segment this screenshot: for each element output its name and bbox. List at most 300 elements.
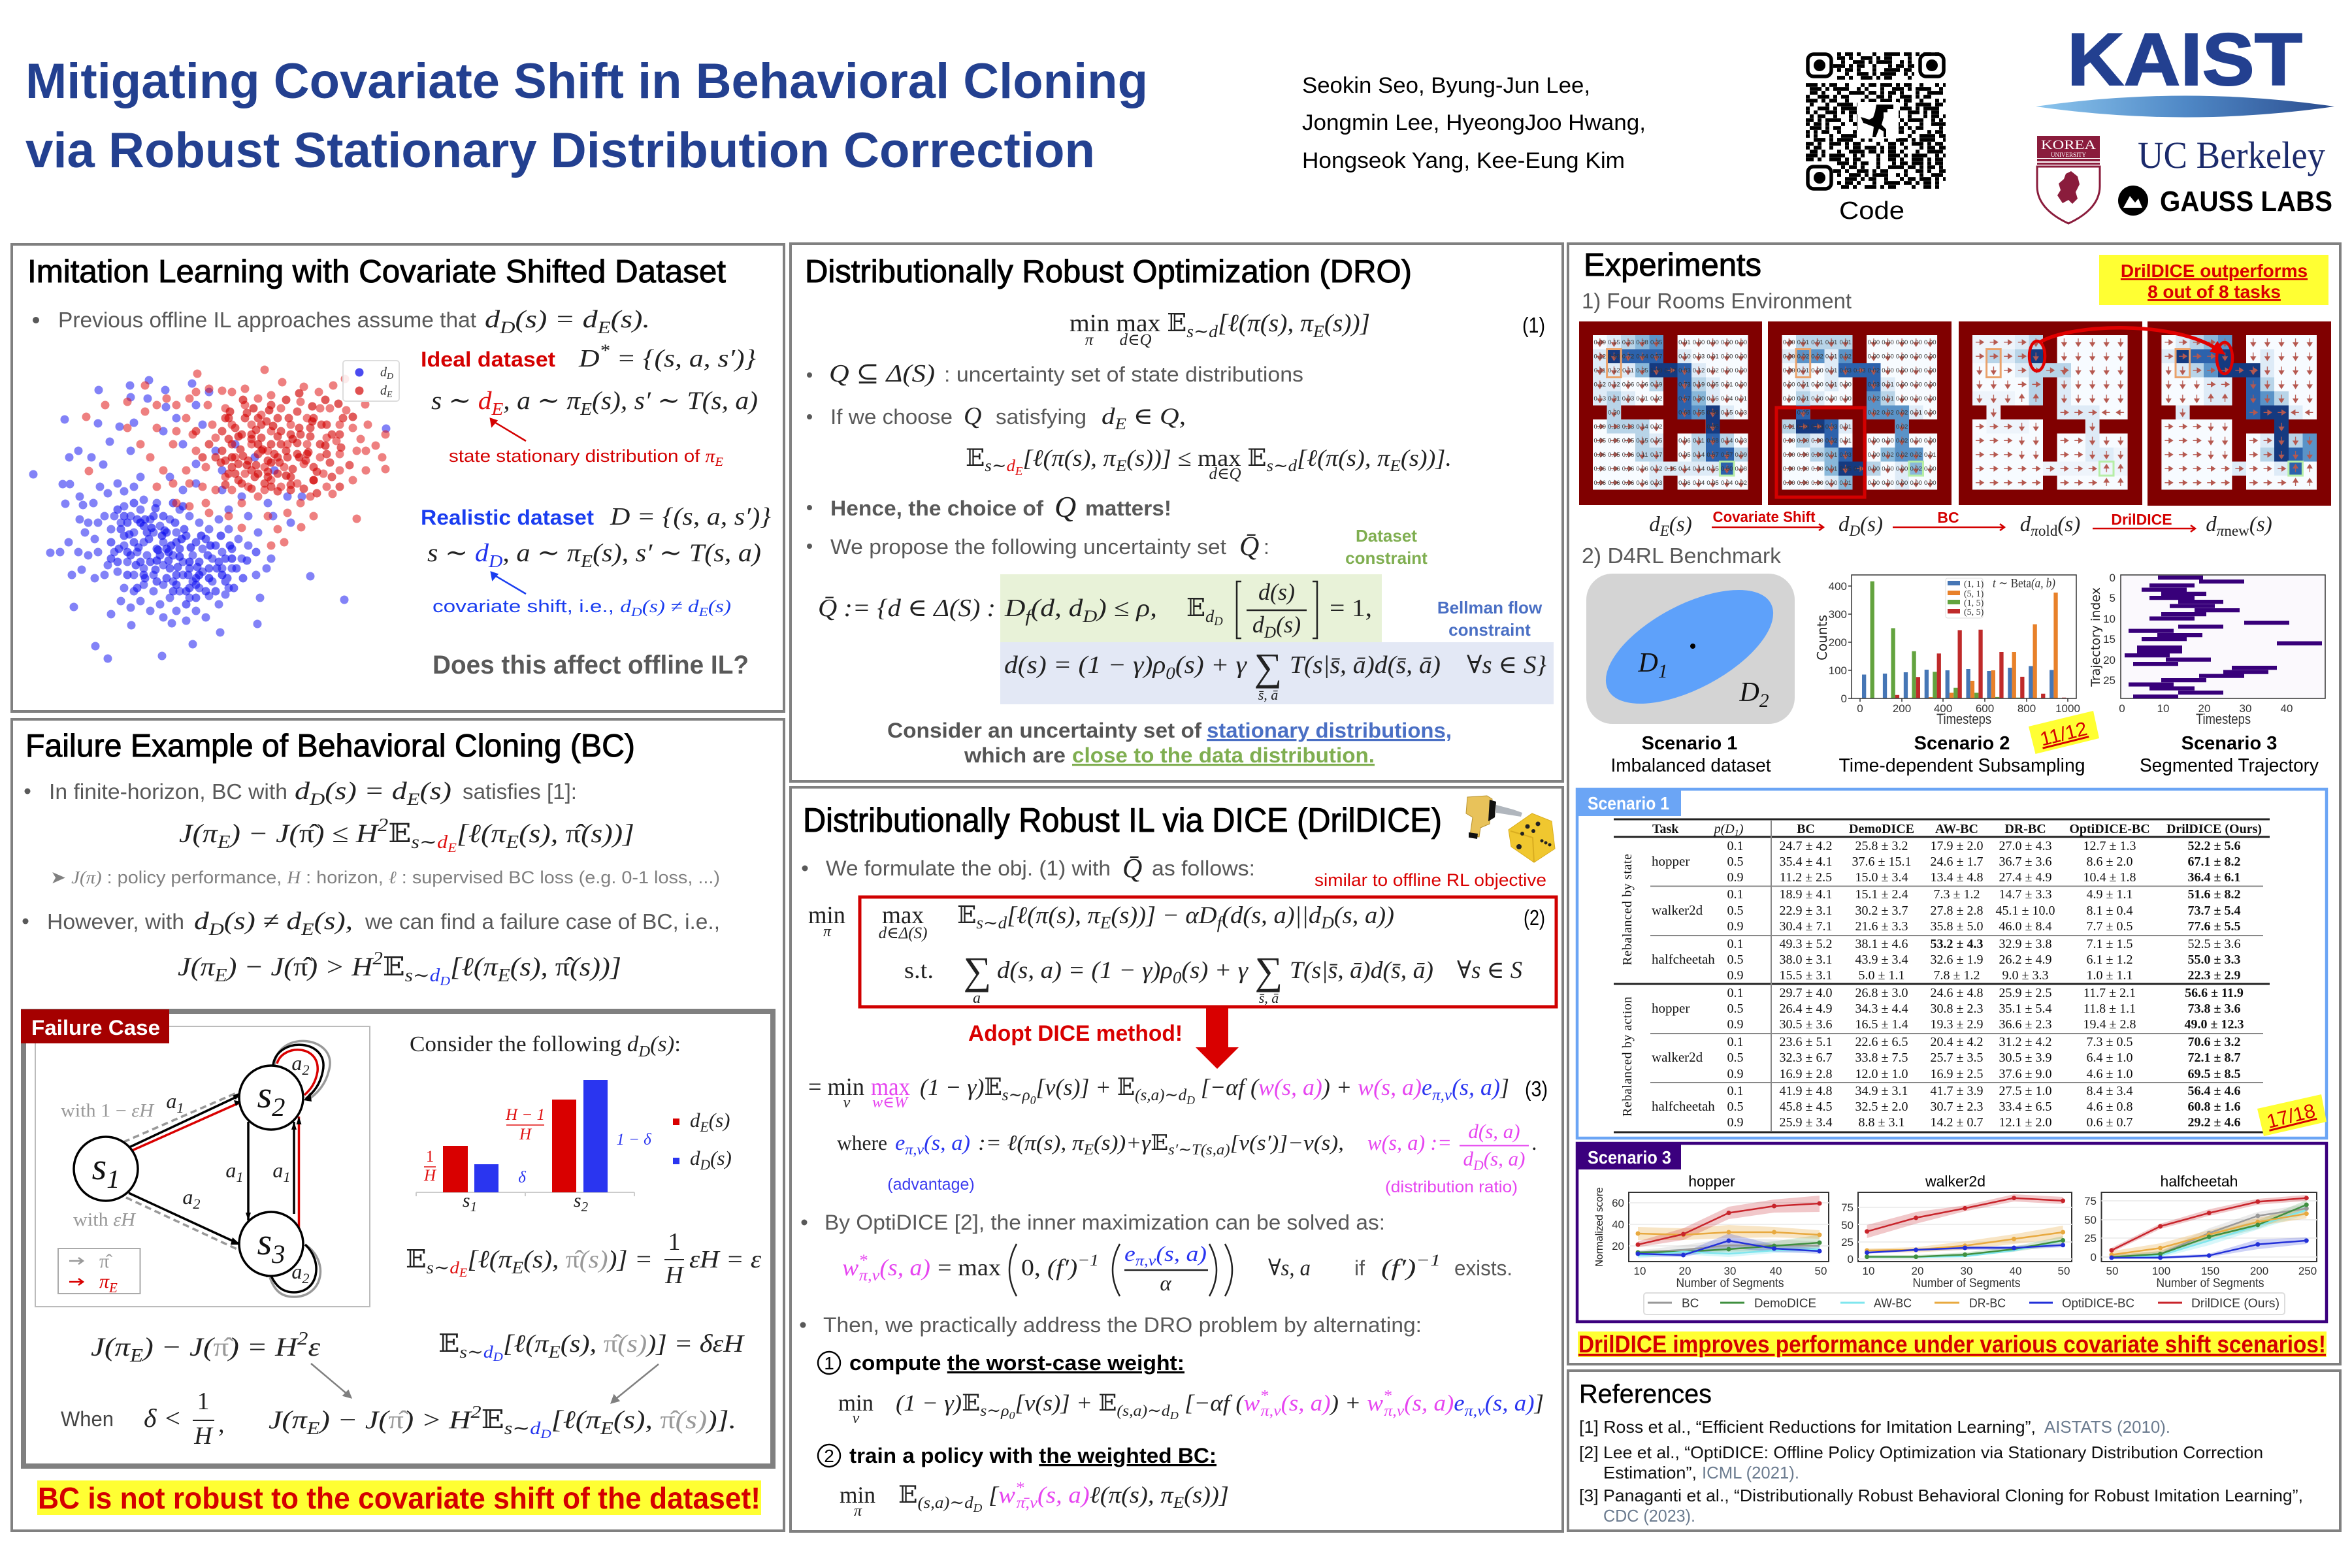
annotation: dataset constraint: [1345, 526, 1428, 568]
highlighted set definition: s̄, ā: [1258, 687, 1278, 703]
results table: 15.5 ± 3.1: [1780, 968, 1832, 983]
cell values: d_E: 0.06: [1608, 465, 1620, 473]
equation: expected loss under d_E: εH = ε: [689, 1246, 761, 1273]
cell values: d_D: 0.00: [1896, 353, 1908, 361]
results table: hopper: [1652, 1000, 1690, 1016]
results table: 0.5: [1727, 855, 1743, 869]
cell values: d_D: 0.00: [1910, 395, 1922, 402]
results table: 4.6 ± 1.0: [2087, 1067, 2132, 1081]
cell values: d_E: 0.14: [1636, 423, 1648, 431]
cell values: d_E: 0.98: [1707, 409, 1719, 417]
bar chart: time-dependent subsampling: 1000: [2055, 702, 2080, 715]
cell values: d_D: [1783, 339, 1936, 487]
sticker: 17/18: [2257, 1094, 2327, 1136]
chart legend: DemoDICE: [1754, 1297, 1816, 1311]
scatter plot: d_D versus d_E: [33, 370, 386, 659]
conclusion: when delta is small: ,: [218, 1411, 225, 1438]
results table: Rebalanced by action: [1620, 996, 1635, 1117]
ideal dataset definition: s ∼ dE, a ∼ π E(s), s′ ∼ T(s, a): [431, 387, 758, 419]
takeaway text: Consider an uncertainty set of: [887, 719, 1201, 742]
cell values: d_D: 0.01: [1882, 395, 1894, 402]
callout: outperforms 8 of 8: 8 out of 8 tasks: [2148, 282, 2281, 302]
cell values: d_D: 0.02: [1868, 409, 1880, 417]
cell values: d_E: 0.06: [1622, 451, 1634, 459]
panel: distributionally robust optimization: [791, 244, 1563, 781]
cell values: d_D: 0.01: [1924, 451, 1936, 459]
bullet: BC bound: dD(s) = d E(s): [295, 777, 451, 809]
MDP diagram: π̂: [99, 1250, 112, 1272]
MDP diagram: πE: [99, 1271, 118, 1296]
cell values: d_E: 0.28: [1636, 339, 1648, 346]
results table: 52.5 ± 3.6: [2188, 937, 2240, 951]
cell values: d_E: 0.05: [1594, 438, 1606, 444]
line chart: walker2d: 40: [2010, 1265, 2021, 1277]
cell values: d_E: 0.13: [1608, 423, 1620, 431]
results table: 27.8 ± 2.8: [1931, 904, 1983, 918]
MDP diagram: a1: [225, 1158, 244, 1185]
bar chart: time-dependent subsampling: (5, 5): [1964, 608, 1984, 617]
line chart: halfcheetah: 150: [2201, 1265, 2219, 1277]
results table: p(D1): [1713, 822, 1744, 838]
results table: 0.9: [1727, 1115, 1743, 1130]
cell values: d_E: 0.12: [1608, 367, 1620, 374]
results table: 19.4 ± 2.8: [2083, 1017, 2136, 1032]
chart: segmented trajectory: 10: [2103, 613, 2115, 625]
line chart: halfcheetah: 50: [2106, 1265, 2118, 1277]
bar chart: time-dependent subsampling: Counts: [1814, 615, 1830, 661]
authors: [1302, 73, 1646, 173]
chart: segmented trajectory: 40: [2281, 702, 2293, 715]
cell values: d_E: 0.00: [1735, 339, 1747, 346]
reference list: [2] Lee et al., “OptiDICE: Offline Policy Optimization via Stationary Distribution Correction: [1579, 1443, 2263, 1462]
bar chart: time-dependent subsampling: 0: [1841, 693, 1847, 705]
takeaway banner: BC is not robust to the covariate shift of the dataset!: [38, 1481, 760, 1515]
cell values: d_D: 0.00: [1910, 367, 1922, 374]
cell values: d_D: 0.02: [1839, 353, 1852, 361]
chart: segmented trajectory: 0: [2119, 702, 2125, 715]
cell values: d_D: 0.03: [1797, 423, 1809, 431]
panel: experiments: [1568, 244, 2340, 1364]
heading: References: [1579, 1380, 1712, 1409]
cell values: d_D: 0.00: [1797, 438, 1809, 444]
cell values: d_E: 0.57: [1721, 451, 1733, 459]
bullet: uncertainty set: : uncertainty set of state distributions: [944, 363, 1303, 386]
cell values: d_E: 1.00: [1650, 367, 1662, 374]
bullet: formulation: as follows:: [1152, 857, 1255, 880]
bar chart: d_E and d_D on s1, s2: s2: [574, 1190, 589, 1215]
label: failure case: Failure Case: [31, 1016, 160, 1039]
highlighted set definition: dD(s): [1252, 612, 1301, 642]
line chart: hopper: 20: [1679, 1265, 1691, 1277]
bar chart: time-dependent subsampling: 0: [1857, 702, 1863, 715]
scenario captions: Segmented Trajectory: [2140, 755, 2319, 776]
cell values: d_E: 0.06: [1594, 480, 1606, 487]
chart: segmented trajectory: Trajectory index: [2089, 587, 2103, 687]
results table: 14.7 ± 3.3: [1999, 887, 2051, 902]
chart: segmented trajectory: 20: [2103, 654, 2115, 666]
equation 3: [808, 1073, 1548, 1111]
cell values: d_E: 0.15: [1721, 409, 1733, 417]
cell values: d_E: 0.06: [1622, 480, 1634, 487]
results table: 73.7 ± 5.4: [2188, 904, 2240, 918]
four rooms heatmap: DrilDICE policy: [2148, 321, 2331, 506]
cell values: d_D: 0.01: [1854, 465, 1866, 473]
cell values: d_E: 0.12: [1650, 465, 1662, 473]
results table: 33.4 ± 6.5: [1999, 1100, 2051, 1114]
highlighted set definition: 𝔼dD: [1186, 595, 1223, 629]
cell values: d_E: 0.01: [1721, 382, 1733, 388]
flow labels: four rooms: DrilDICE: [2111, 511, 2172, 528]
reference list: ICML (2021).: [1702, 1463, 1799, 1482]
cell values: d_D: 0.01: [1825, 353, 1837, 361]
line chart: halfcheetah: 0: [2091, 1251, 2097, 1264]
bullet: failure with covariate shift: However, with: [47, 909, 184, 934]
conclusion: when delta is small: δ <: [144, 1403, 182, 1433]
cell values: d_E: 0.57: [1650, 353, 1662, 361]
cell values: d_E: 0.15: [1707, 465, 1719, 473]
cell values: d_D: 0.00: [1910, 353, 1922, 361]
bullet: OptiDICE: By OptiDICE [2], the inner maximization can be solved as:: [825, 1211, 1385, 1234]
results table: 55.0 ± 3.3: [2188, 953, 2240, 967]
cell values: d_D: 0.00: [1811, 451, 1823, 459]
results table: 0.9: [1727, 968, 1743, 983]
bullet: choosing Q: Q: [964, 402, 981, 430]
line chart: walker2d: 75: [1841, 1201, 1854, 1214]
scatter legend: dE: [380, 384, 393, 400]
heading: Imitation Learning with Covariate Shifted Dataset: [27, 254, 726, 289]
flow labels: four rooms: dπnew(s): [2206, 513, 2272, 539]
results table: 12.7 ± 1.3: [2083, 839, 2136, 853]
equation: policy update: π: [854, 1503, 862, 1520]
results table: 77.6 ± 5.5: [2188, 919, 2240, 934]
scatter legend: [343, 361, 399, 401]
cell values: d_E: 0.03: [1693, 353, 1705, 361]
equation 2 box: ∑: [964, 949, 991, 992]
reference list: [1] Ross et al., “Efficient Reductions for Imitation Learning”,: [1579, 1417, 2036, 1437]
equation 3: w∈W: [872, 1094, 909, 1111]
step 2: weighted BC: 2: [824, 1446, 834, 1466]
cell values: d_E: 0.06: [1636, 382, 1648, 388]
scenario captions: Scenario 3: [2181, 733, 2277, 754]
bar chart: time-dependent subsampling: 300: [1829, 608, 1847, 621]
cell values: d_E: 0.05: [1622, 438, 1634, 444]
equation: closed-form weight: ∀s, a: [1268, 1255, 1311, 1281]
line chart: hopper: 30: [1724, 1265, 1736, 1277]
cell values: d_E: 0.06: [1636, 465, 1648, 473]
equation: closed-form weight: 0, (f′)−1: [1021, 1252, 1099, 1281]
line chart: hopper: 20: [1612, 1240, 1624, 1252]
results table: OptiDICE-BC: [2069, 822, 2150, 836]
cell values: d_E: 0.06: [1636, 480, 1648, 487]
line chart: halfcheetah: 50: [2084, 1214, 2097, 1226]
equation 1: (1): [1522, 313, 1545, 337]
equation 3: (3): [1525, 1077, 1548, 1101]
results table: 0.1: [1727, 1035, 1743, 1049]
cell values: d_E: 0.14: [1678, 465, 1691, 473]
equation 3: max: [871, 1073, 910, 1101]
equation 3: (1 − γ)𝔼s∼ρ0[ν(s)] + 𝔼(s,a)∼dD [−αf (w(s, a)) + w(s, a)eπ,ν(s, a)]: [920, 1074, 1509, 1107]
arrow: adopt DICE: [1196, 1008, 1239, 1069]
cell values: d_E: 0.19: [1650, 382, 1662, 388]
MDP diagram: a1: [166, 1089, 184, 1116]
scatter legend: dD: [380, 365, 393, 382]
chart: segmented trajectory: [2089, 572, 2325, 727]
results table: 32.5 ± 2.0: [1855, 1100, 1908, 1114]
equation 2 box: s̄, ā: [1259, 990, 1279, 1006]
cell values: d_E: 0.14: [1693, 465, 1705, 473]
results table: 4.6 ± 0.8: [2087, 1100, 2132, 1114]
cell values: d_D: 0.00: [1910, 382, 1922, 388]
results table: 8.8 ± 3.1: [1859, 1115, 1904, 1130]
cell values: d_D: 0.03: [1868, 382, 1880, 388]
MDP diagram: s1: [92, 1145, 120, 1194]
cell values: d_D: 0.00: [1868, 451, 1880, 459]
bar chart: time-dependent subsampling: 100: [1829, 664, 1847, 677]
flow labels: four rooms: dD(s): [1838, 513, 1883, 539]
results table: 26.8 ± 3.0: [1855, 986, 1908, 1000]
results table: 33.8 ± 7.5: [1855, 1051, 1908, 1065]
step 1: compute worst-case weight: 1: [824, 1353, 834, 1373]
cell values: d_E: 0.15: [1608, 339, 1620, 346]
cell values: d_E: 0.19: [1693, 382, 1705, 388]
cell values: d_D: 0.00: [1882, 480, 1894, 487]
cell values: d_E: 0.72: [1622, 353, 1634, 361]
bullet: choice matters: Hence, the choice of: [830, 497, 1043, 520]
cell values: d_D: 0.01: [1825, 465, 1837, 473]
chart: segmented trajectory: 5: [2110, 592, 2115, 604]
line chart: halfcheetah: 75: [2084, 1195, 2097, 1207]
results table: 10.4 ± 1.8: [2083, 870, 2136, 885]
equation 2 box: 𝔼s∼d[ℓ(π(s), πE(s))] − αD f(d(s, a)||dD(s, a)): [957, 902, 1394, 932]
line chart: halfcheetah: 25: [2084, 1232, 2097, 1245]
bullet: formulation: Q̄: [1122, 854, 1142, 884]
cell values: d_D: 0.00: [1924, 382, 1936, 388]
MDP diagram: a1: [272, 1158, 291, 1185]
cell values: d_E: 0.06: [1594, 465, 1606, 473]
results table: 7.1 ± 1.5: [2087, 937, 2132, 951]
authors: Hongseok Yang, Kee-Eung Kim: [1302, 148, 1625, 173]
results table: 53.2 ± 4.3: [1931, 937, 1983, 951]
cell values: d_E: 0.05: [1650, 438, 1662, 444]
cell values: d_D: 0.02: [1868, 367, 1880, 374]
cell values: d_E: 0.21: [1608, 395, 1620, 402]
cell values: d_E: 0.67: [1707, 451, 1719, 459]
bullet: uncertainty set: Q ⊆ Δ(S): [829, 360, 935, 387]
cell values: d_D: 0.00: [1783, 438, 1795, 444]
ideal dataset definition: D* = {(s, a, s′)}: [578, 340, 756, 372]
cell values: d_D: 0.02: [1868, 395, 1880, 402]
cell values: d_D: 0.02: [1910, 451, 1922, 459]
logo: KAIST: KAIST: [2067, 18, 2302, 101]
reference list: CDC (2023).: [1603, 1506, 1695, 1526]
cell values: d_D: 0.00: [1924, 480, 1936, 487]
cell values: d_E: 0.06: [1608, 480, 1620, 487]
highlighted set definition: ∀s ∈ S}: [1467, 651, 1546, 679]
results table: 37.6 ± 9.0: [1999, 1067, 2051, 1081]
cell values: d_E: 0.11: [1693, 438, 1705, 444]
cell values: d_E: 0.15: [1636, 438, 1648, 444]
bar chart: time-dependent subsampling: 400: [1934, 702, 1952, 715]
results table: 27.4 ± 4.9: [1999, 870, 2051, 885]
reference list: [3] Panaganti et al., “Distributionally Robust Behavioral Cloning for Robust Imitation Learning”,: [1579, 1486, 2303, 1505]
realistic dataset definition: D = {(s, a, s′)}: [610, 503, 771, 531]
where line: advantage and ratio definitions: where: [837, 1131, 887, 1154]
results table: 15.0 ± 3.4: [1855, 870, 1908, 885]
cell values: d_D: 0.00: [1811, 480, 1823, 487]
results table: 7.3 ± 1.2: [1934, 887, 1980, 902]
cell values: d_E: 0.01: [1636, 395, 1648, 402]
cell values: d_E: 0.67: [1678, 395, 1691, 402]
curved arrow: policy correction: [2029, 328, 2232, 374]
results table: 21.6 ± 3.3: [1855, 919, 1908, 934]
QR code to code repository: [1786, 54, 1946, 189]
cell values: d_E: 0.00: [1693, 339, 1705, 346]
panel: failure example of behavioral cloning: [12, 719, 784, 1531]
y axis label: Normalized score: [1593, 1187, 1605, 1267]
bar chart: d_E and d_D on s1, s2: H − 1: [505, 1106, 545, 1124]
MDP diagram: a2: [182, 1185, 201, 1212]
cell values: d_E: 0.00: [1735, 382, 1747, 388]
results table: 11.2 ± 2.5: [1780, 870, 1832, 885]
results table: 7.8 ± 1.2: [1934, 968, 1980, 983]
logo: Korea University: [2037, 136, 2100, 223]
MDP diagram: a2: [291, 1051, 310, 1078]
label: advantage: (advantage): [887, 1175, 975, 1194]
results table: 0.1: [1727, 986, 1743, 1000]
cell values: d_D: 0.01: [1839, 438, 1852, 444]
results table: 27.0 ± 4.3: [1999, 839, 2051, 853]
where line: advantage and ratio definitions: w(s, a) :=: [1367, 1132, 1452, 1155]
cell values: d_D: 0.00: [1783, 353, 1795, 361]
results table: 30.7 ± 2.3: [1931, 1100, 1983, 1114]
text: consider the following: Consider the following dD(s):: [410, 1032, 681, 1060]
cell values: d_D: 0.02: [1825, 438, 1837, 444]
arrow: to d_E: [491, 419, 526, 441]
highlighted set definition: = 1,: [1330, 595, 1372, 622]
equation: policy update: 𝔼(s,a)∼d D [w*π̄,ν(s, a)ℓ(π(s), π E(s))]: [898, 1479, 1229, 1514]
bullet: proposal: We propose the following uncertainty set: [830, 535, 1226, 559]
diagram: imbalanced dataset: D1: [1637, 648, 1668, 682]
title: via Robust Stationary Distribution Correction: [25, 123, 1095, 178]
step 2: weighted BC: train a policy with the weighted BC:: [849, 1444, 1217, 1467]
conclusion: when delta is small: [61, 1388, 736, 1450]
bullet: BC bound: satisfies [1]:: [463, 779, 577, 804]
highlighted set definition: Q̄ := {d ∈ Δ(S) :: [818, 595, 996, 622]
bullet: uncertainty set: [807, 360, 1303, 387]
results table: 26.4 ± 4.9: [1780, 1002, 1832, 1016]
takeaway text: which are: [964, 743, 1066, 767]
cell values: d_D: 0.01: [1839, 339, 1852, 346]
where line: advantage and ratio definitions: d(s, a): [1468, 1120, 1520, 1143]
cell values: d_E: 0.12: [1608, 382, 1620, 388]
authors: Seokin Seo, Byung-Jun Lee,: [1302, 73, 1590, 98]
bullet: proposal: :: [1264, 535, 1269, 559]
cell values: d_E: 0.04: [1721, 395, 1733, 402]
cell values: d_D: 0.03: [1854, 367, 1866, 374]
min outside box: min: [808, 902, 845, 929]
bar chart: d_E and d_D on s1, s2: H: [519, 1126, 532, 1143]
cell values: d_E: 0.23: [1622, 339, 1634, 346]
question: Does this affect offline IL?: [433, 651, 749, 679]
results table: 35.4 ± 4.1: [1780, 855, 1832, 869]
cell values: d_D: 0.02: [1896, 409, 1908, 417]
bullet: choosing Q: dE ∈ Q,: [1102, 403, 1186, 433]
results table: 0.1: [1727, 839, 1743, 853]
chart legend: [1644, 1293, 2285, 1315]
min outside box: π: [823, 923, 832, 940]
cell values: d_E: 0.05: [1608, 451, 1620, 459]
equation: policy update: min: [840, 1482, 875, 1508]
bullet: choice matters: [807, 490, 1171, 523]
results table: 49.0 ± 12.3: [2185, 1017, 2244, 1032]
cell values: d_D: 0.00: [1868, 438, 1880, 444]
results table: 52.2 ± 5.6: [2188, 839, 2240, 853]
cell values: d_D: 0.01: [1825, 382, 1837, 388]
equation 2 box: max: [882, 902, 924, 929]
cell values: d_E: 0.25: [1636, 367, 1648, 374]
bar chart: d_E and d_D on s1, s2: [416, 1080, 732, 1215]
cell values: d_D: 0.00: [1882, 438, 1894, 444]
cell values: d_D: 0.00: [1924, 395, 1936, 402]
title: [25, 54, 1148, 178]
results table: 37.6 ± 15.1: [1852, 855, 1911, 869]
highlighted set definition: d(s): [1258, 579, 1295, 605]
results table: 14.2 ± 0.7: [1931, 1115, 1983, 1130]
chart legend: DR-BC: [1969, 1297, 2006, 1311]
equation: expected loss under d_E: 𝔼s∼dE[ℓ(πE(s), π̂(s))] =: [406, 1246, 653, 1280]
cell values: d_D: 0.00: [1825, 395, 1837, 402]
cell values: d_D: 0.05: [1839, 465, 1852, 473]
results table: 4.9 ± 1.1: [2087, 887, 2132, 902]
equation 2 box: ∀s ∈ S: [1457, 957, 1522, 984]
line chart: hopper: Number of Segments: [1676, 1277, 1784, 1290]
cell values: d_D: 0.00: [1783, 382, 1795, 388]
label: scenario 1: [1576, 788, 1681, 816]
cell values: d_E: 0.64: [1636, 353, 1648, 361]
realistic dataset definition: [421, 503, 771, 571]
cell values: d_E: 0.00: [1721, 339, 1733, 346]
equation 1: [1070, 310, 1545, 349]
results table: 25.8 ± 3.2: [1855, 839, 1908, 853]
cell values: d_E: 0.01: [1735, 395, 1747, 402]
equation 3: ν: [843, 1094, 851, 1111]
bar chart: time-dependent subsampling: 400: [1829, 580, 1847, 593]
line chart: hopper: 40: [1612, 1218, 1624, 1231]
results table: 32.9 ± 3.8: [1999, 937, 2051, 951]
panel: distributionally robust IL via DICE: [791, 787, 1563, 1531]
equation 2 box: d∈Δ(S): [879, 924, 927, 942]
cell values: d_E: 0.13: [1594, 395, 1606, 402]
label: distribution ratio: (distribution ratio): [1385, 1178, 1518, 1196]
cell values: d_D: 0.01: [1811, 339, 1823, 346]
cell values: d_D: 0.05: [1797, 409, 1809, 417]
equation: closed-form weight: exists.: [1454, 1256, 1512, 1280]
takeaway text: close to the data distribution.: [1072, 743, 1375, 767]
equation: nu update: min: [838, 1390, 874, 1416]
results table: 17.9 ± 2.0: [1931, 839, 1983, 853]
scenario captions: [1611, 733, 2319, 776]
highlighted set definition: [818, 574, 1554, 704]
sticker: 11/12: [2029, 711, 2099, 754]
cell values: d_D: 0.00: [1839, 382, 1852, 388]
scenario captions: Imbalanced dataset: [1611, 755, 1771, 776]
equation 1: π: [1085, 331, 1094, 349]
MDP diagram: with εH: [73, 1210, 137, 1230]
cell values: d_D: 0.00: [1783, 451, 1795, 459]
line chart: halfcheetah: 200: [2250, 1265, 2268, 1277]
cell values: d_D: 0.01: [1797, 339, 1809, 346]
cell values: d_D: 0.00: [1783, 339, 1795, 346]
